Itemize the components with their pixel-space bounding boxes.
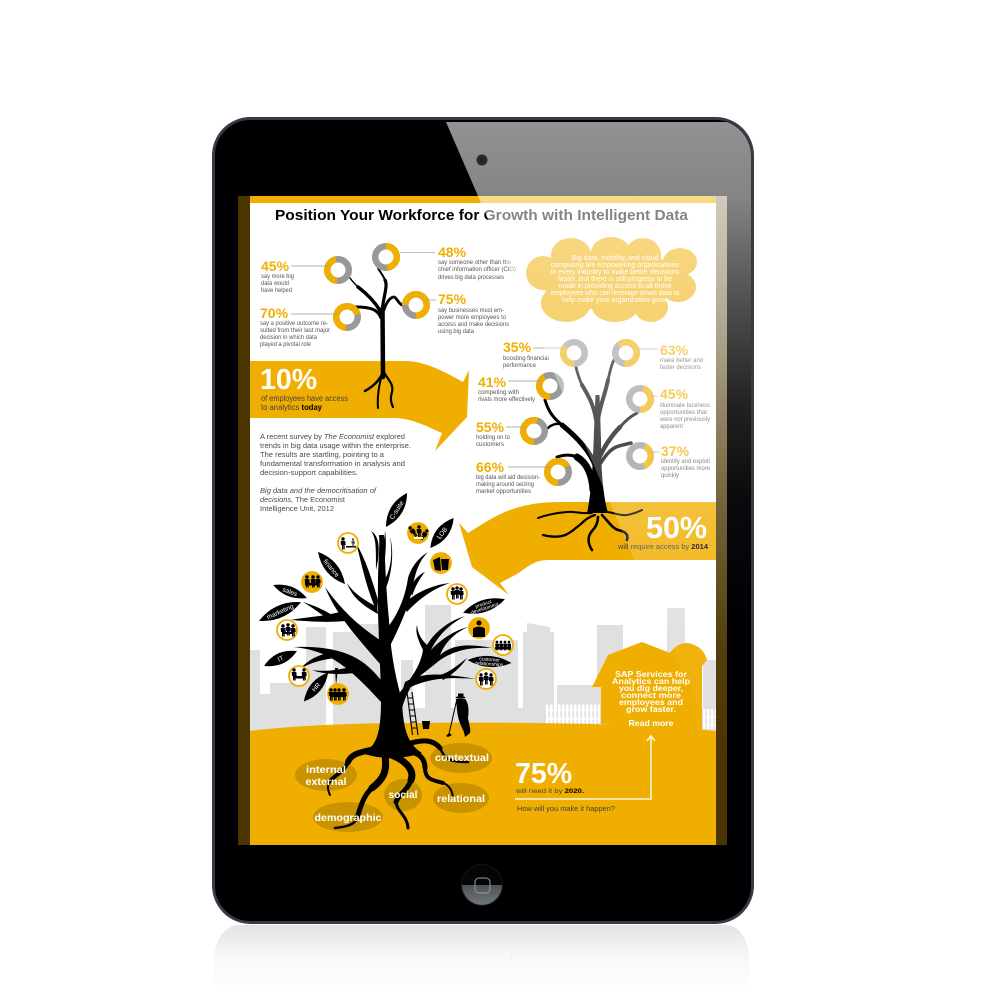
cloud <box>526 237 697 322</box>
barn text <box>612 669 690 728</box>
cloud text: help make your organization grow. <box>562 297 668 304</box>
stat: 75% <box>426 291 509 335</box>
bezel glare <box>446 122 751 524</box>
stat: 66%: big data will aid decision- <box>476 474 540 481</box>
75% callout <box>515 758 615 813</box>
leaf: finance: finance <box>321 558 341 579</box>
leaf: sales <box>271 580 309 603</box>
donut: 66% <box>547 461 569 483</box>
survey paragraph: Intelligence Unit, 2012 <box>260 504 334 513</box>
donut: 37% <box>626 442 654 470</box>
tablet body <box>214 118 752 922</box>
survey paragraph: fundamental transformation in analysis and <box>260 459 405 468</box>
stat: 35% <box>503 339 565 369</box>
donut: 41% <box>539 375 561 397</box>
arrow banner: 10% <box>250 361 469 451</box>
stat: 70%: decision in which data <box>260 334 317 341</box>
cloud text <box>550 255 680 304</box>
cloud text: in every industry to make better decisions <box>551 269 680 276</box>
barn <box>592 642 707 732</box>
stat: 37%: quickly <box>661 472 680 479</box>
stat: 55%: 55% <box>476 419 505 435</box>
stat: 70%: played a pivotal role <box>260 341 311 348</box>
title: Position Your Workforce for Growth with Intelligent Data <box>275 208 689 224</box>
barn text: connect more <box>621 690 681 700</box>
stat: 37%: 37% <box>661 443 690 459</box>
stat: 48%: say someone other than the <box>438 259 511 266</box>
75% callout: 75% <box>515 758 572 790</box>
arrow banner: 50% <box>459 502 716 595</box>
stat: 45%: 45% <box>261 258 290 274</box>
stat: 41%: 41% <box>478 374 507 390</box>
stat: 75%: power more employees to <box>438 314 506 321</box>
leaf: product development: product <box>475 599 493 610</box>
stat: 35%: boosting financial <box>503 355 549 362</box>
stat: 41% <box>478 374 542 403</box>
leaf: marketing <box>257 597 303 626</box>
yellow ground <box>250 723 716 845</box>
big tree <box>291 530 492 828</box>
people icon: meeting <box>493 635 513 655</box>
stat: 70%: 70% <box>260 305 289 321</box>
stat: 66%: market opportunities <box>476 488 531 495</box>
camera <box>476 154 488 166</box>
barn text: you dig deeper, <box>619 683 683 693</box>
top yellow bar <box>238 196 727 203</box>
stat: 37% <box>648 443 710 479</box>
stat: 63%: make better and <box>660 357 703 364</box>
bucket <box>422 721 430 729</box>
donut: 55% <box>523 420 545 442</box>
leaf: LOB: LOB <box>436 526 449 541</box>
75% callout: How will you make it happen? <box>517 806 615 813</box>
stat: 45%: say more big <box>261 273 294 280</box>
stat: 45% right: apparent <box>660 423 683 430</box>
root labels: relational <box>437 793 485 805</box>
donut: 48% <box>375 246 397 268</box>
survey paragraph <box>260 432 411 513</box>
stat: 75%: using big data <box>438 328 474 335</box>
root labels <box>306 752 489 824</box>
ladder <box>407 692 418 735</box>
leaf: IT <box>262 646 299 671</box>
stat: 66% <box>476 459 550 495</box>
donut: 70% <box>335 305 359 329</box>
leaf: sales: sales <box>281 586 299 598</box>
people icon: marketing <box>277 620 297 640</box>
10% callout: of employees have access <box>261 394 348 403</box>
root labels: internal <box>306 764 346 776</box>
barn text: grow faster. <box>626 704 676 714</box>
stat: 37%: identify and exploit <box>661 458 710 465</box>
leaf: finance <box>313 548 350 588</box>
stat: 75%: say businesses must em- <box>438 307 504 314</box>
stat: 45% <box>261 258 328 294</box>
50% callout: 50% <box>646 511 707 545</box>
stat: 63%: 63% <box>660 342 689 358</box>
people icon: HR <box>328 684 348 704</box>
stat: 45% right: opportunities that <box>660 409 707 416</box>
stat: 45%: data would <box>261 280 289 287</box>
cloud text: employees who can leverage smart data to <box>550 290 680 297</box>
survey paragraph: trends in big data usage within the enterprise. <box>260 441 411 450</box>
survey paragraph: Big data and the democritisation of <box>260 486 377 495</box>
stat: 66%: making around seizing <box>476 481 534 488</box>
leaf: HR <box>300 669 332 705</box>
stat: 41%: competing with <box>478 389 519 396</box>
stat: 48%: drives big data processes <box>438 274 504 281</box>
root labels: contextual <box>435 752 489 764</box>
barn text: Read more <box>628 718 674 728</box>
side strips <box>238 196 727 845</box>
people icon: C-suite <box>407 523 430 543</box>
stat: 48%: 48% <box>438 244 467 260</box>
50% callout: will require access by 2014 <box>617 544 708 551</box>
stat: 48% <box>400 244 516 281</box>
root labels: demographic <box>314 812 382 824</box>
survey paragraph: decisions, The Economist <box>260 495 346 504</box>
stat: 41%: rivals more effectively <box>478 396 536 403</box>
barn text: SAP Services for <box>615 669 688 679</box>
leaf: C-suite <box>381 490 412 530</box>
donut: 75% <box>405 294 427 316</box>
leaf: C-suite: C-suite <box>389 500 406 521</box>
leaf: customer relationships <box>467 654 512 669</box>
root labels: social <box>388 789 418 801</box>
people icon: finance <box>302 572 322 592</box>
barn text: employees and <box>619 697 683 707</box>
survey paragraph: A recent survey by The Economist explored <box>260 432 405 441</box>
stat: 45%: have helped <box>261 287 292 294</box>
leaf: LOB <box>426 514 458 552</box>
leaf: product development: development <box>470 601 500 616</box>
cloud text: Big data, mobility, and cloud <box>572 255 659 262</box>
arrow to read more <box>515 736 655 799</box>
survey paragraph: decision-support capabilities. <box>260 468 358 477</box>
donut: 45% <box>326 258 350 282</box>
root labels: external <box>306 776 347 788</box>
small tree <box>350 268 402 408</box>
people icon: group of four <box>447 584 467 604</box>
10% callout <box>260 364 348 412</box>
donut: 63% <box>611 338 641 368</box>
stat: 70%: sulted from their last major <box>260 327 330 334</box>
white fences <box>546 710 716 725</box>
50% callout <box>617 511 708 551</box>
infographic screen <box>238 196 727 845</box>
stat: 75%: access and make decisions <box>438 321 509 328</box>
stat: 66%: 66% <box>476 459 505 475</box>
barn text: Analytics can help <box>612 676 690 686</box>
middle tree <box>538 360 642 550</box>
leaf: HR: HR <box>311 681 323 693</box>
stat: 63% <box>637 342 703 371</box>
people icon: customer relationships <box>476 669 496 689</box>
leaf: marketing: marketing <box>266 603 295 621</box>
right strip glare <box>716 196 727 500</box>
gardener silhouette <box>446 694 470 737</box>
75% callout: will need it by 2020. <box>515 788 584 795</box>
stat: 35%: performance <box>503 362 536 369</box>
stat: 55%: holding on to <box>476 434 510 441</box>
stat: 75%: 75% <box>438 291 467 307</box>
tablet reflection <box>214 925 750 990</box>
stat: 37%: opportunities more <box>661 465 710 472</box>
stat: 45% right: were not previously <box>659 416 711 423</box>
cloud text: faster. But there is still progress to be <box>558 276 672 283</box>
stat: 48%: chief information officer (CIO) <box>438 266 516 273</box>
survey paragraph: The results are startling, pointing to a <box>260 450 385 459</box>
leaf: customer relationships: relationships <box>475 661 504 668</box>
home button <box>462 864 502 906</box>
donut: 45% right <box>627 386 653 412</box>
10% callout: 10% <box>260 364 317 396</box>
stat: 45% right: 45% <box>660 386 689 402</box>
donut: 35% <box>563 342 585 364</box>
people icon: product development <box>469 618 489 638</box>
city skyline <box>250 605 716 740</box>
people icon: LOB <box>431 553 451 573</box>
stat: 55% <box>476 419 525 448</box>
stat: 45% right: illuminate business <box>660 402 710 409</box>
stat: 45% right <box>650 386 711 430</box>
stat: 70%: say a positive outcome re- <box>260 320 328 327</box>
leaf: product development <box>461 593 507 619</box>
leaf: IT: IT <box>277 655 285 664</box>
stat: 35%: 35% <box>503 339 532 355</box>
stat: 63%: faster decisions <box>660 364 701 371</box>
stat: 55%: customers <box>476 441 504 448</box>
people icon: IT <box>289 666 309 686</box>
screen glare <box>478 196 727 775</box>
stat: 70% <box>260 305 338 348</box>
cloud text: computing are empowering organizations <box>551 262 680 269</box>
10% callout: to analytics today <box>261 403 323 412</box>
root label ovals <box>295 743 492 832</box>
cloud text: made in providing access to all those <box>558 283 672 290</box>
people icon: top left <box>338 533 358 553</box>
leaf: customer relationships: customer <box>479 656 500 664</box>
black bezel left of glare <box>446 122 478 626</box>
screen background <box>238 196 727 845</box>
